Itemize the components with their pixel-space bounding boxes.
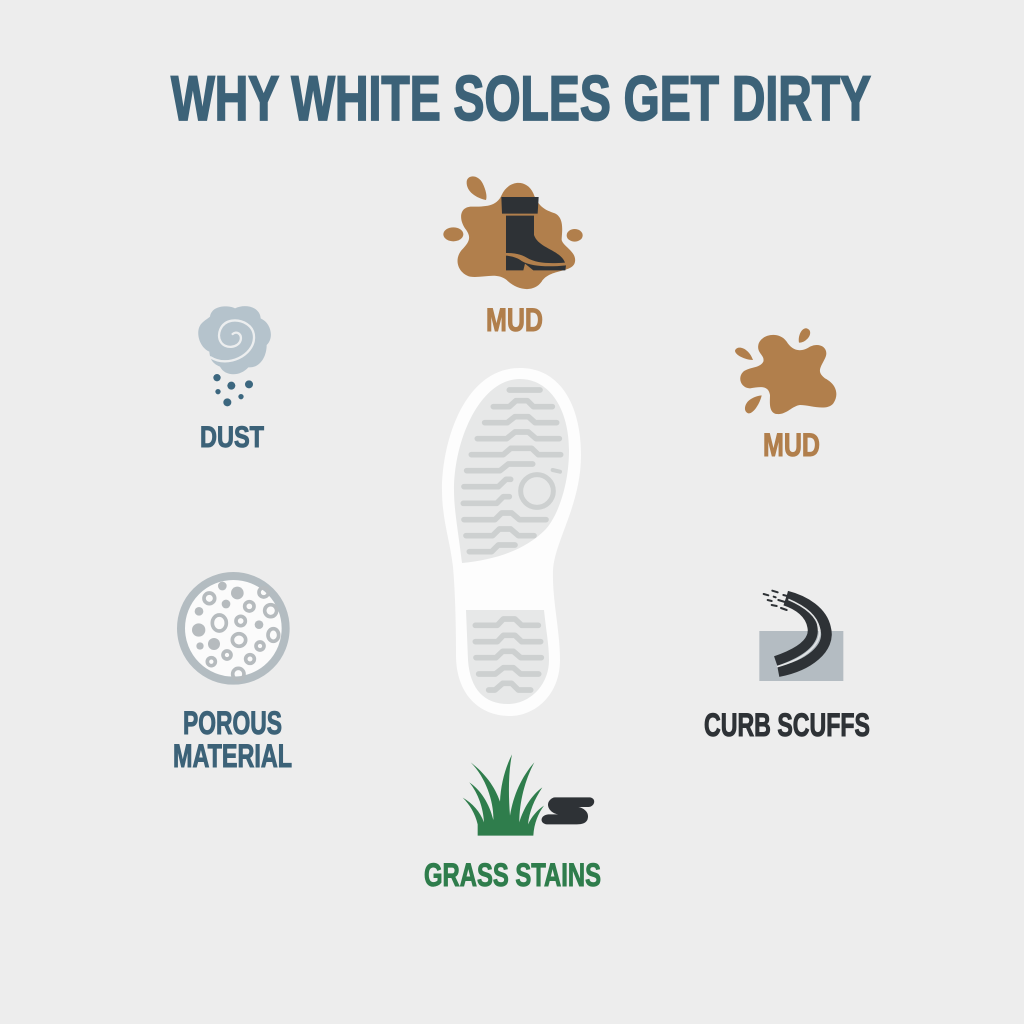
label: porous material: MATERIAL <box>173 738 292 774</box>
forefoot tread panel <box>454 379 569 563</box>
label: porous material <box>173 705 292 774</box>
icon: dust cloud <box>198 306 271 406</box>
label: mud right: MUD <box>763 427 820 463</box>
icon: porous material <box>181 576 286 681</box>
icon: mud splat <box>735 328 836 414</box>
heel tread panel <box>466 610 549 704</box>
icon: grass and smudge <box>463 754 594 836</box>
label: dust: DUST <box>200 421 264 454</box>
icon: mud with boot <box>443 176 583 289</box>
label: mud top: MUD <box>486 302 543 338</box>
tread lines <box>463 390 561 690</box>
label: grass stains: GRASS STAINS <box>424 857 601 893</box>
label: porous material: POROUS <box>183 705 282 741</box>
label: curb scuffs: CURB SCUFFS <box>704 707 870 743</box>
sole outline <box>442 368 581 716</box>
icon: curb scuffs <box>759 591 843 681</box>
icon: shoe sole <box>442 368 581 716</box>
